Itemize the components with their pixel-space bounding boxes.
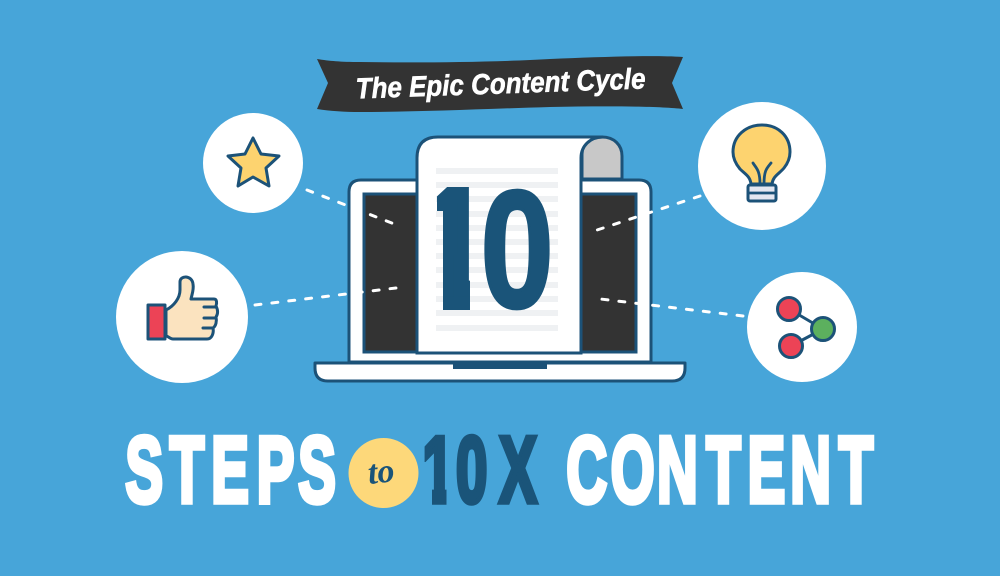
big number 10: 1 <box>422 160 484 339</box>
dashed connector lines <box>255 190 743 316</box>
big number 10: 0 <box>481 157 554 343</box>
icon circle: light bulb <box>698 102 826 230</box>
icon circle: thumbs up <box>116 251 248 383</box>
yellow circle: to: to <box>366 452 396 492</box>
laptop <box>315 180 685 381</box>
banner: The Epic Content Cycle: The Epic Content Cycle <box>355 63 646 105</box>
title: CONTENT: CONTENT <box>566 418 873 523</box>
banner: The Epic Content Cycle <box>317 56 683 112</box>
title: 10X: 10X <box>422 418 537 523</box>
icon circle: share nodes <box>747 272 857 382</box>
scroll roll behind paper <box>582 137 622 179</box>
icon circle: star <box>203 113 303 213</box>
yellow circle: to <box>348 438 418 508</box>
big number 10 <box>437 187 550 310</box>
paper text lines <box>436 168 558 331</box>
paper document <box>417 137 603 353</box>
title: STEPS: STEPS <box>125 418 336 523</box>
